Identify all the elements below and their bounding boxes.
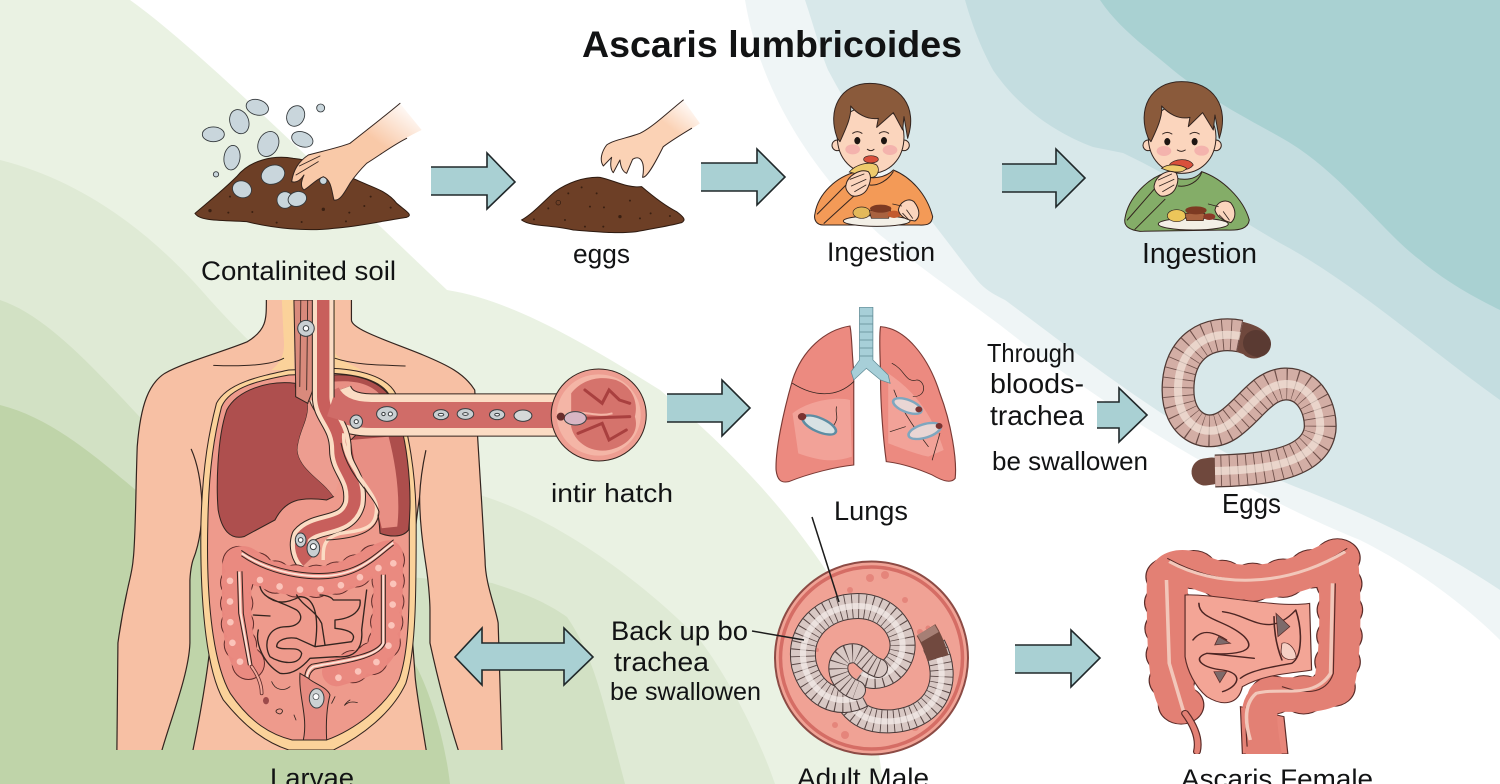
body silhouette [117,300,502,750]
liver [217,383,334,537]
label: intir hatch: intir hatch [551,478,673,508]
icon: child in green shirt eating [1125,82,1249,231]
icon: ascaris worm [1178,335,1320,472]
intestinal ball [551,369,646,461]
appendix [1185,713,1198,752]
lower tube and egg [300,673,330,740]
label: contaminated soil: Contalinited soil [201,256,396,286]
text block: through bloodstream to trachea [987,338,1148,476]
arrow: trachea to worm [1097,388,1147,442]
esophagus and stomach tube [301,297,358,562]
lung and spleen region [332,375,410,536]
label: eggs: eggs [573,239,630,269]
appendix [252,667,262,693]
neck and shoulder structures [272,300,361,370]
pointer line: top [812,517,839,602]
double arrow: body and trachea text [455,628,593,685]
arrow: soil to eggs [431,153,515,209]
eggs inside tract [298,320,532,428]
small intestine [1185,595,1312,703]
text block: back up to trachea: trachea [614,647,710,677]
trachea [294,300,315,403]
rectum [1240,707,1288,754]
arrow: intestine to lungs [667,380,750,436]
text block: back up to trachea: Back up bo [611,616,748,646]
text block: through bloodstream to trachea: be swallowen [992,446,1148,476]
icon: contaminated soil with eggs and hand [195,97,422,230]
icon: adult male worm in circular cross-section [775,562,968,754]
colon [1167,557,1340,757]
eggs in stomach [295,533,320,557]
text block: through bloodstream to trachea: trachea [990,400,1084,431]
abdominal cavity [201,368,416,750]
text block: through bloodstream to trachea: bloods- [990,368,1084,399]
title: Ascaris lumbricoides [582,24,962,65]
arrow: eggs to ingestion [701,149,785,205]
text block: back up to trachea: be swallowen [610,678,761,706]
label: ingestion (green child): Ingestion [1142,238,1257,270]
icon: lungs with larvae [776,307,956,482]
icon: large intestine with worm female [1166,548,1347,757]
large intestine [230,555,393,678]
icon: child in orange shirt eating [815,83,933,226]
intestinal branch with villus [327,393,575,415]
icon: soil pile with hand [522,100,700,233]
label: ingestion (orange child): Ingestion [827,237,935,267]
label: lungs: Lungs [834,496,908,526]
arrow: worm to intestine [1015,630,1100,687]
label: eggs (worm): Eggs [1222,488,1281,519]
second tube loop [323,433,377,560]
small intestine [253,587,367,674]
arrow: first to second ingestion [1002,149,1085,207]
text block: through bloodstream to trachea: Through [987,338,1075,368]
text block: back up to trachea [610,616,761,706]
illustration: human body cross-section with digestive tract [117,297,646,750]
pointer line: left [752,631,804,640]
